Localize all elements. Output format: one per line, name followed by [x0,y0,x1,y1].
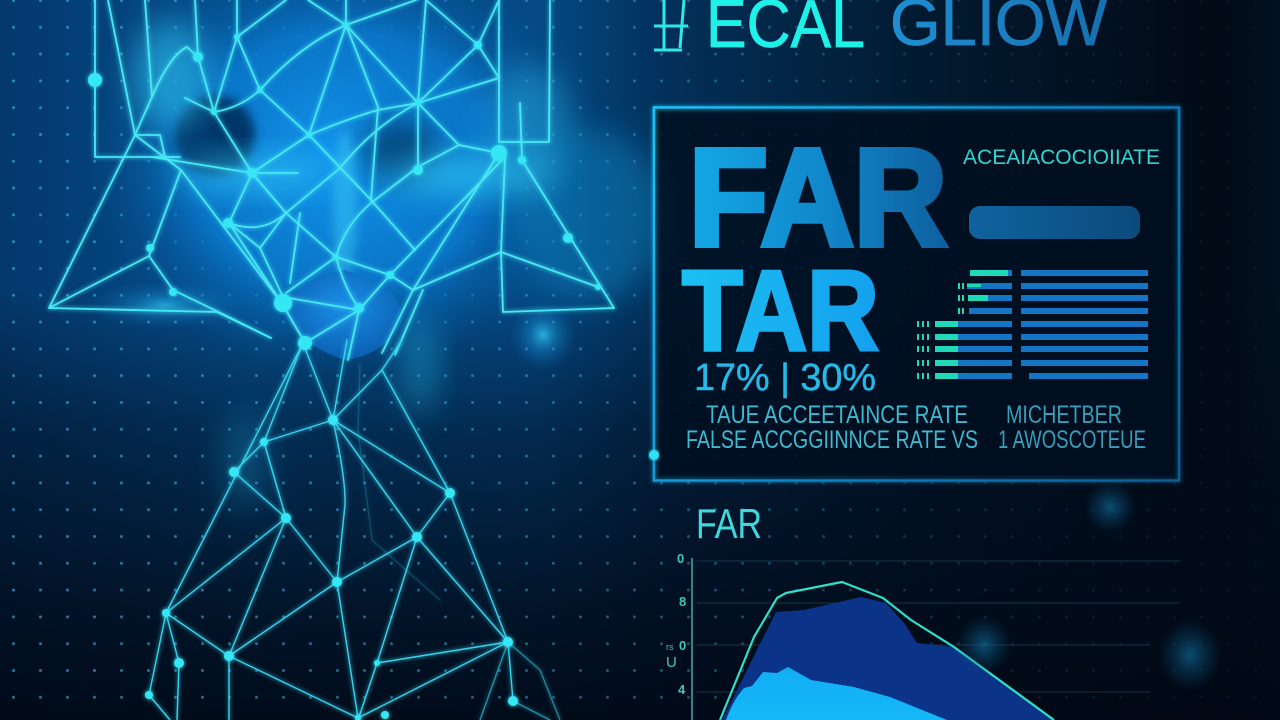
gridlines and axis [697,561,1180,692]
title [654,0,1108,62]
caption: first row right: MICHETBER [1006,401,1122,429]
axis labels [666,551,686,697]
polygon mesh: head and face [49,0,614,360]
caption: first row: TAUE ACCEETAINCE RATE [706,401,968,429]
axis labels: 8 [679,594,686,609]
label: accuracy: ACEAIACOCIOIIATE [963,146,1160,169]
chart: FAR curve [666,500,1180,720]
axis labels: 4 [678,682,686,697]
dark blue area [722,597,1054,720]
chart title: FAR [696,500,762,547]
axis labels: 0 [679,638,686,653]
glow: face and ambient light [85,0,665,510]
panel: metrics [649,108,1179,480]
panel node [649,450,659,460]
title glyph: overlapped first letter [654,0,688,50]
curve line [720,582,1054,720]
metric heading: FAR: FAR [689,121,947,275]
metric heading: TAR: TAR [682,248,879,375]
chin highlight [285,270,402,360]
rounded progress bar [969,206,1140,239]
axis labels: U [666,654,677,671]
caption: second row right: 1 AWOSCOTEUE [998,426,1146,454]
axis labels: 0 [677,551,684,566]
ambient glows: lower right [956,481,1222,691]
axis labels: rs [666,642,674,652]
metric values: 17% | 30% [694,357,876,399]
panel frame [654,108,1179,480]
mesh nodes [88,22,601,720]
caption: second row: FALSE ACCGGIINNCE RATE VS [686,426,978,454]
horizontal bar list [917,270,1148,379]
light blue area [726,667,947,720]
polygon mesh: neck and shoulders [149,340,560,720]
